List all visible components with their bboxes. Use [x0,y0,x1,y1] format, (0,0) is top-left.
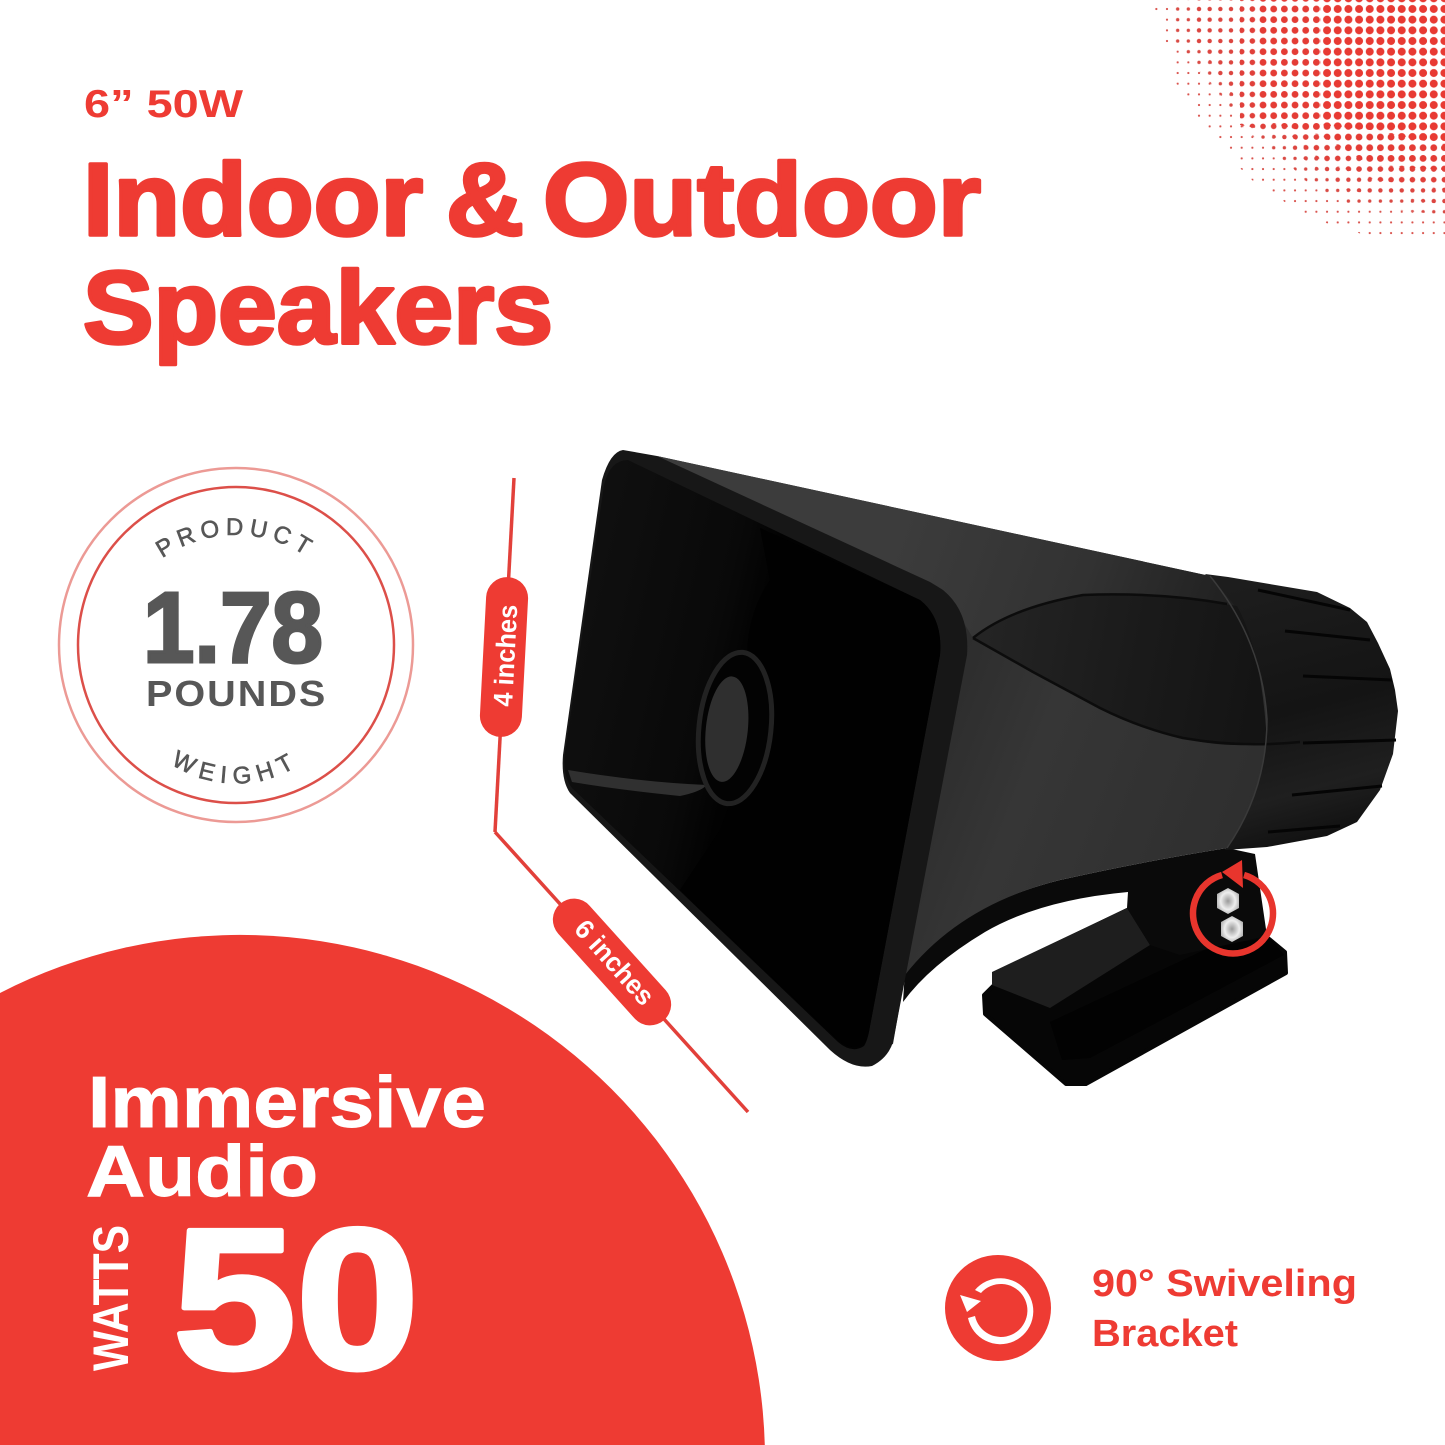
unit: pounds: POUNDS [146,675,325,715]
heading: immersive audio: Audio [86,1132,318,1212]
speaker rear cylinder [1205,574,1398,850]
speaker bracket base [984,908,1286,1084]
icon: swivel arrow [945,1255,1051,1361]
red quarter circle panel [0,935,765,1445]
label: product: PRODUCT [154,518,314,558]
speaker bracket arm [903,848,1267,1002]
feature label: 90 degree swiveling bracket: Bracket [1092,1313,1238,1355]
heading: immersive audio: Immersive [88,1063,486,1143]
weight badge [58,466,414,824]
subtitle: 6 inch 50W: 6” 50W [84,83,243,126]
label: watts: WATTS [83,1225,139,1371]
title: Indoor and Outdoor Speakers: Indoor [83,142,423,257]
halftone dot pattern [1150,0,1445,240]
bracket bolts [1217,888,1243,942]
title: Indoor and Outdoor Speakers: Outdoor [543,142,981,257]
speaker product drawing [563,450,1398,1084]
speaker mouth dark well [680,528,940,1047]
title: Indoor and Outdoor Speakers: Speakers [83,250,553,365]
dimension: 6 inches [495,832,748,1112]
dimension: 6 inches: 6 inches [569,914,660,1011]
speaker mouth interior [564,460,940,1049]
title: Indoor and Outdoor Speakers [83,142,981,365]
speaker driver ring [691,649,779,807]
dimension: 4 inches [479,478,529,832]
dimension: 4 inches: 4 inches [488,604,523,707]
panel: immersive audio 50 watts [83,1063,486,1411]
speaker mouth rim [563,450,967,1067]
heading: immersive audio [86,1063,486,1212]
speaker horn body [657,456,1300,1060]
icon: red rotation arrow on bracket [1193,860,1273,953]
feature label: 90 degree swiveling bracket: 90° Swiveling [1092,1263,1357,1305]
feature label: 90 degree swiveling bracket [1092,1263,1357,1355]
speaker mouth reflection [568,770,707,796]
number: 50: 50 [173,1188,419,1411]
value: 1.78: 1.78 [143,572,323,684]
title: Indoor and Outdoor Speakers: & [446,142,524,257]
label: weight: WEIGHT [174,749,290,784]
